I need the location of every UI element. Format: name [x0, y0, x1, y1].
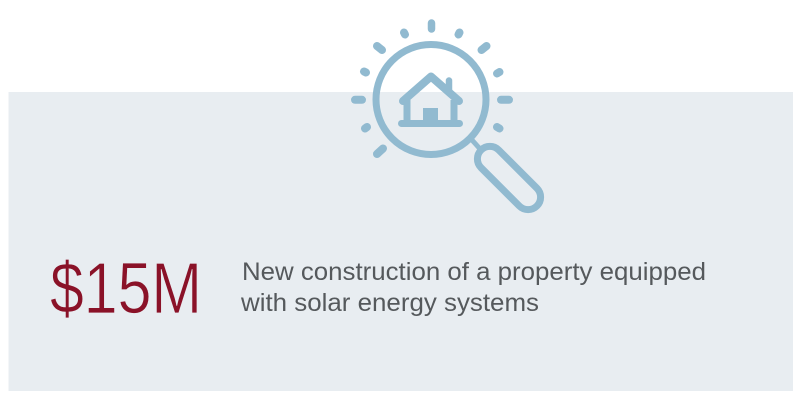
- icon: handle connector: [472, 140, 481, 150]
- icon: house walls: [407, 100, 454, 122]
- description text: [240, 258, 706, 317]
- icon: house: [402, 76, 460, 124]
- description line 2: with solar energy systems: [240, 289, 539, 317]
- description line 1: New construction of a property equipped: [242, 258, 706, 286]
- icon: magnifying glass with house and rays: [355, 23, 546, 215]
- icon: door: [423, 108, 438, 121]
- icon: chimney: [446, 80, 452, 93]
- icon: lens ring: [376, 44, 486, 154]
- panel: background: [8, 92, 793, 391]
- icon: house roof: [403, 76, 459, 101]
- icon: house base: [402, 120, 460, 127]
- icon: rays: [355, 23, 509, 154]
- headline figure: $15M: [50, 249, 202, 329]
- icon: handle: [472, 141, 546, 215]
